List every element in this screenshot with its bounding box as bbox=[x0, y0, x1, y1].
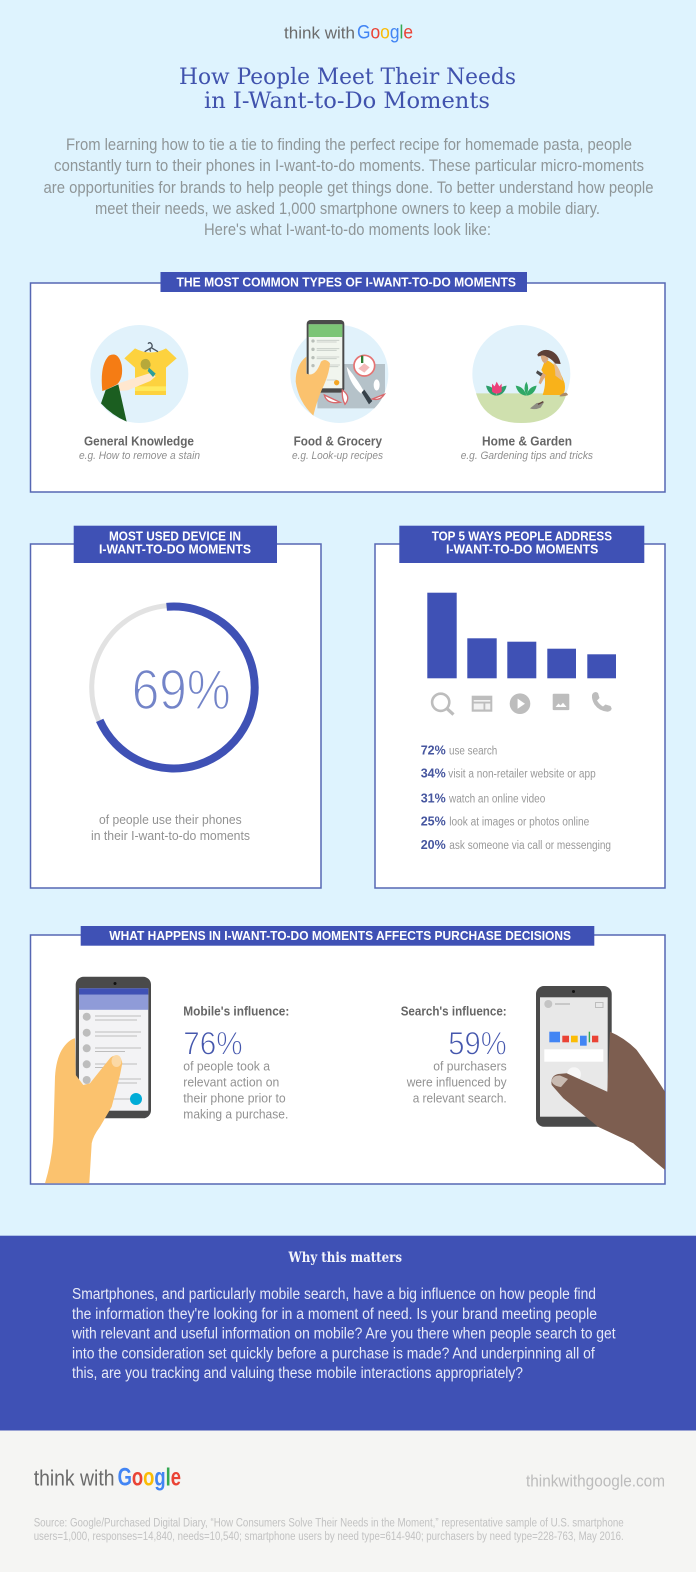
donut chart: 69% bbox=[92, 606, 255, 768]
panel: purchase decisions bbox=[30, 926, 665, 1184]
panel heading: most used device bbox=[74, 526, 277, 563]
caption: phone use: of people use their phones bbox=[99, 812, 242, 827]
text: mobile's influence: Mobile's influence: bbox=[183, 1004, 289, 1019]
panel heading: most used device: I-WANT-TO-DO MOMENTS bbox=[99, 542, 251, 556]
footer logo: think with bbox=[34, 1466, 115, 1491]
panel heading: top 5 ways: I-WANT-TO-DO MOMENTS bbox=[446, 542, 599, 556]
text: mobile's influence: of people took a bbox=[183, 1059, 271, 1074]
stat list bbox=[421, 742, 611, 852]
label: general knowledge bbox=[79, 434, 200, 462]
icon: phone call bbox=[592, 692, 612, 712]
panel heading: most common types bbox=[160, 272, 527, 292]
icon: hand holding phone, mobile bbox=[45, 977, 151, 1183]
panel: top 5 ways bbox=[375, 526, 665, 888]
panel heading: most used device: MOST USED DEVICE IN bbox=[109, 529, 241, 544]
bar chart bbox=[427, 593, 616, 678]
intro text: constantly turn to their phones in I-want-to-do moments. These particular micro-moments bbox=[54, 157, 644, 175]
stat list: visit a non-retailer website or app bbox=[448, 768, 596, 780]
stat list: 72% bbox=[421, 742, 446, 757]
label: general knowledge: General Knowledge bbox=[84, 434, 194, 449]
panel heading: most common types: THE MOST COMMON TYPES OF I-WANT-TO-DO MOMENTS bbox=[176, 275, 516, 290]
label: food and grocery: Food & Grocery bbox=[294, 434, 383, 449]
body text: this, are you tracking and valuing these mobile interactions appropriately? bbox=[72, 1365, 523, 1382]
text: mobile's influence: making a purchase. bbox=[183, 1107, 288, 1122]
panel heading: top 5 ways: TOP 5 WAYS PEOPLE ADDRESS bbox=[432, 529, 612, 544]
icon: search bbox=[432, 694, 454, 715]
icon: general knowledge, woman cleaning shirt bbox=[90, 325, 188, 423]
stat list: watch an online video bbox=[448, 794, 545, 806]
body text: Smartphones, and particularly mobile search, have a big influence on how people find bbox=[72, 1286, 596, 1303]
label: general knowledge: e.g. How to remove a stain bbox=[79, 450, 200, 462]
panel heading: top 5 ways bbox=[399, 526, 644, 563]
text: search's influence: were influenced by bbox=[406, 1075, 507, 1090]
source note bbox=[34, 1518, 624, 1543]
intro text: meet their needs, we asked 1,000 smartphone owners to keep a mobile diary. bbox=[95, 200, 600, 218]
logo: think with Google bbox=[284, 22, 413, 44]
icon: website bbox=[472, 696, 492, 712]
footer logo bbox=[34, 1464, 181, 1492]
text: search's influence bbox=[401, 1004, 507, 1106]
logo: think with Google: Google bbox=[357, 22, 413, 44]
text: mobile's influence: 76% bbox=[183, 1025, 243, 1061]
text: search's influence: a relevant search. bbox=[413, 1091, 507, 1106]
body text: into the consideration set quickly before a purchase is made? And underpinning all of bbox=[72, 1345, 595, 1362]
stat list: look at images or photos online bbox=[449, 816, 589, 828]
caption: phone use bbox=[91, 812, 250, 843]
label: food and grocery bbox=[292, 434, 383, 462]
stat list: 31% bbox=[421, 791, 446, 806]
label: home and garden: Home & Garden bbox=[482, 434, 572, 449]
panel: most common types bbox=[30, 272, 665, 492]
text: search's influence: of purchasers bbox=[433, 1059, 507, 1074]
title: in I-Want-to-Do Moments bbox=[204, 89, 490, 114]
icon: home and garden, woman gardening bbox=[472, 325, 570, 423]
text: mobile's influence: relevant action on bbox=[183, 1075, 279, 1090]
stat list: ask someone via call or messenging bbox=[449, 840, 611, 852]
label: food and grocery: e.g. Look-up recipes bbox=[292, 450, 383, 462]
icon: video play bbox=[510, 693, 530, 714]
footer url: thinkwithgoogle.com bbox=[526, 1472, 665, 1491]
intro text: From learning how to tie a tie to finding the perfect recipe for homemade pasta, people bbox=[66, 136, 632, 154]
text: search's influence: Search's influence: bbox=[401, 1004, 507, 1019]
panel: why this matters bbox=[0, 1236, 696, 1431]
text: mobile's influence: their phone prior to bbox=[183, 1091, 286, 1106]
footer bbox=[0, 1430, 696, 1572]
icon: image bbox=[553, 694, 569, 710]
footer logo: Google bbox=[118, 1464, 181, 1492]
text: search's influence: 59% bbox=[448, 1025, 507, 1061]
body text bbox=[71, 1286, 616, 1382]
caption: phone use: in their I-want-to-do moments bbox=[91, 828, 250, 843]
label: home and garden bbox=[461, 434, 593, 462]
icon: food and grocery, phone and cutting board bbox=[290, 320, 388, 423]
label: home and garden: e.g. Gardening tips and tricks bbox=[461, 450, 593, 462]
big number: 69%: 69% bbox=[132, 658, 231, 722]
icon: hand holding phone, search bbox=[536, 986, 665, 1170]
stat list: 20% bbox=[421, 837, 446, 852]
body text: with relevant and useful information on mobile? Are you there when people search to get bbox=[71, 1326, 616, 1343]
text: mobile's influence bbox=[183, 1004, 289, 1122]
title bbox=[179, 65, 516, 114]
title: How People Meet Their Needs bbox=[179, 65, 516, 90]
panel: most used device bbox=[30, 526, 321, 888]
panel heading: purchase decisions: WHAT HAPPENS IN I-WANT-TO-DO MOMENTS AFFECTS PURCHASE DECISIONS bbox=[109, 928, 571, 943]
logo: think with Google: think with bbox=[284, 24, 355, 42]
stat list: use search bbox=[449, 745, 497, 757]
heading: why this matters: Why this matters bbox=[288, 1250, 402, 1266]
intro text: Here's what I-want-to-do moments look like: bbox=[204, 221, 491, 239]
intro text bbox=[44, 136, 654, 239]
stat list: 25% bbox=[421, 813, 446, 828]
stat list: 34% bbox=[421, 765, 446, 780]
body text: the information they're looking for in a moment of need. Is your brand meeting people bbox=[72, 1306, 597, 1323]
